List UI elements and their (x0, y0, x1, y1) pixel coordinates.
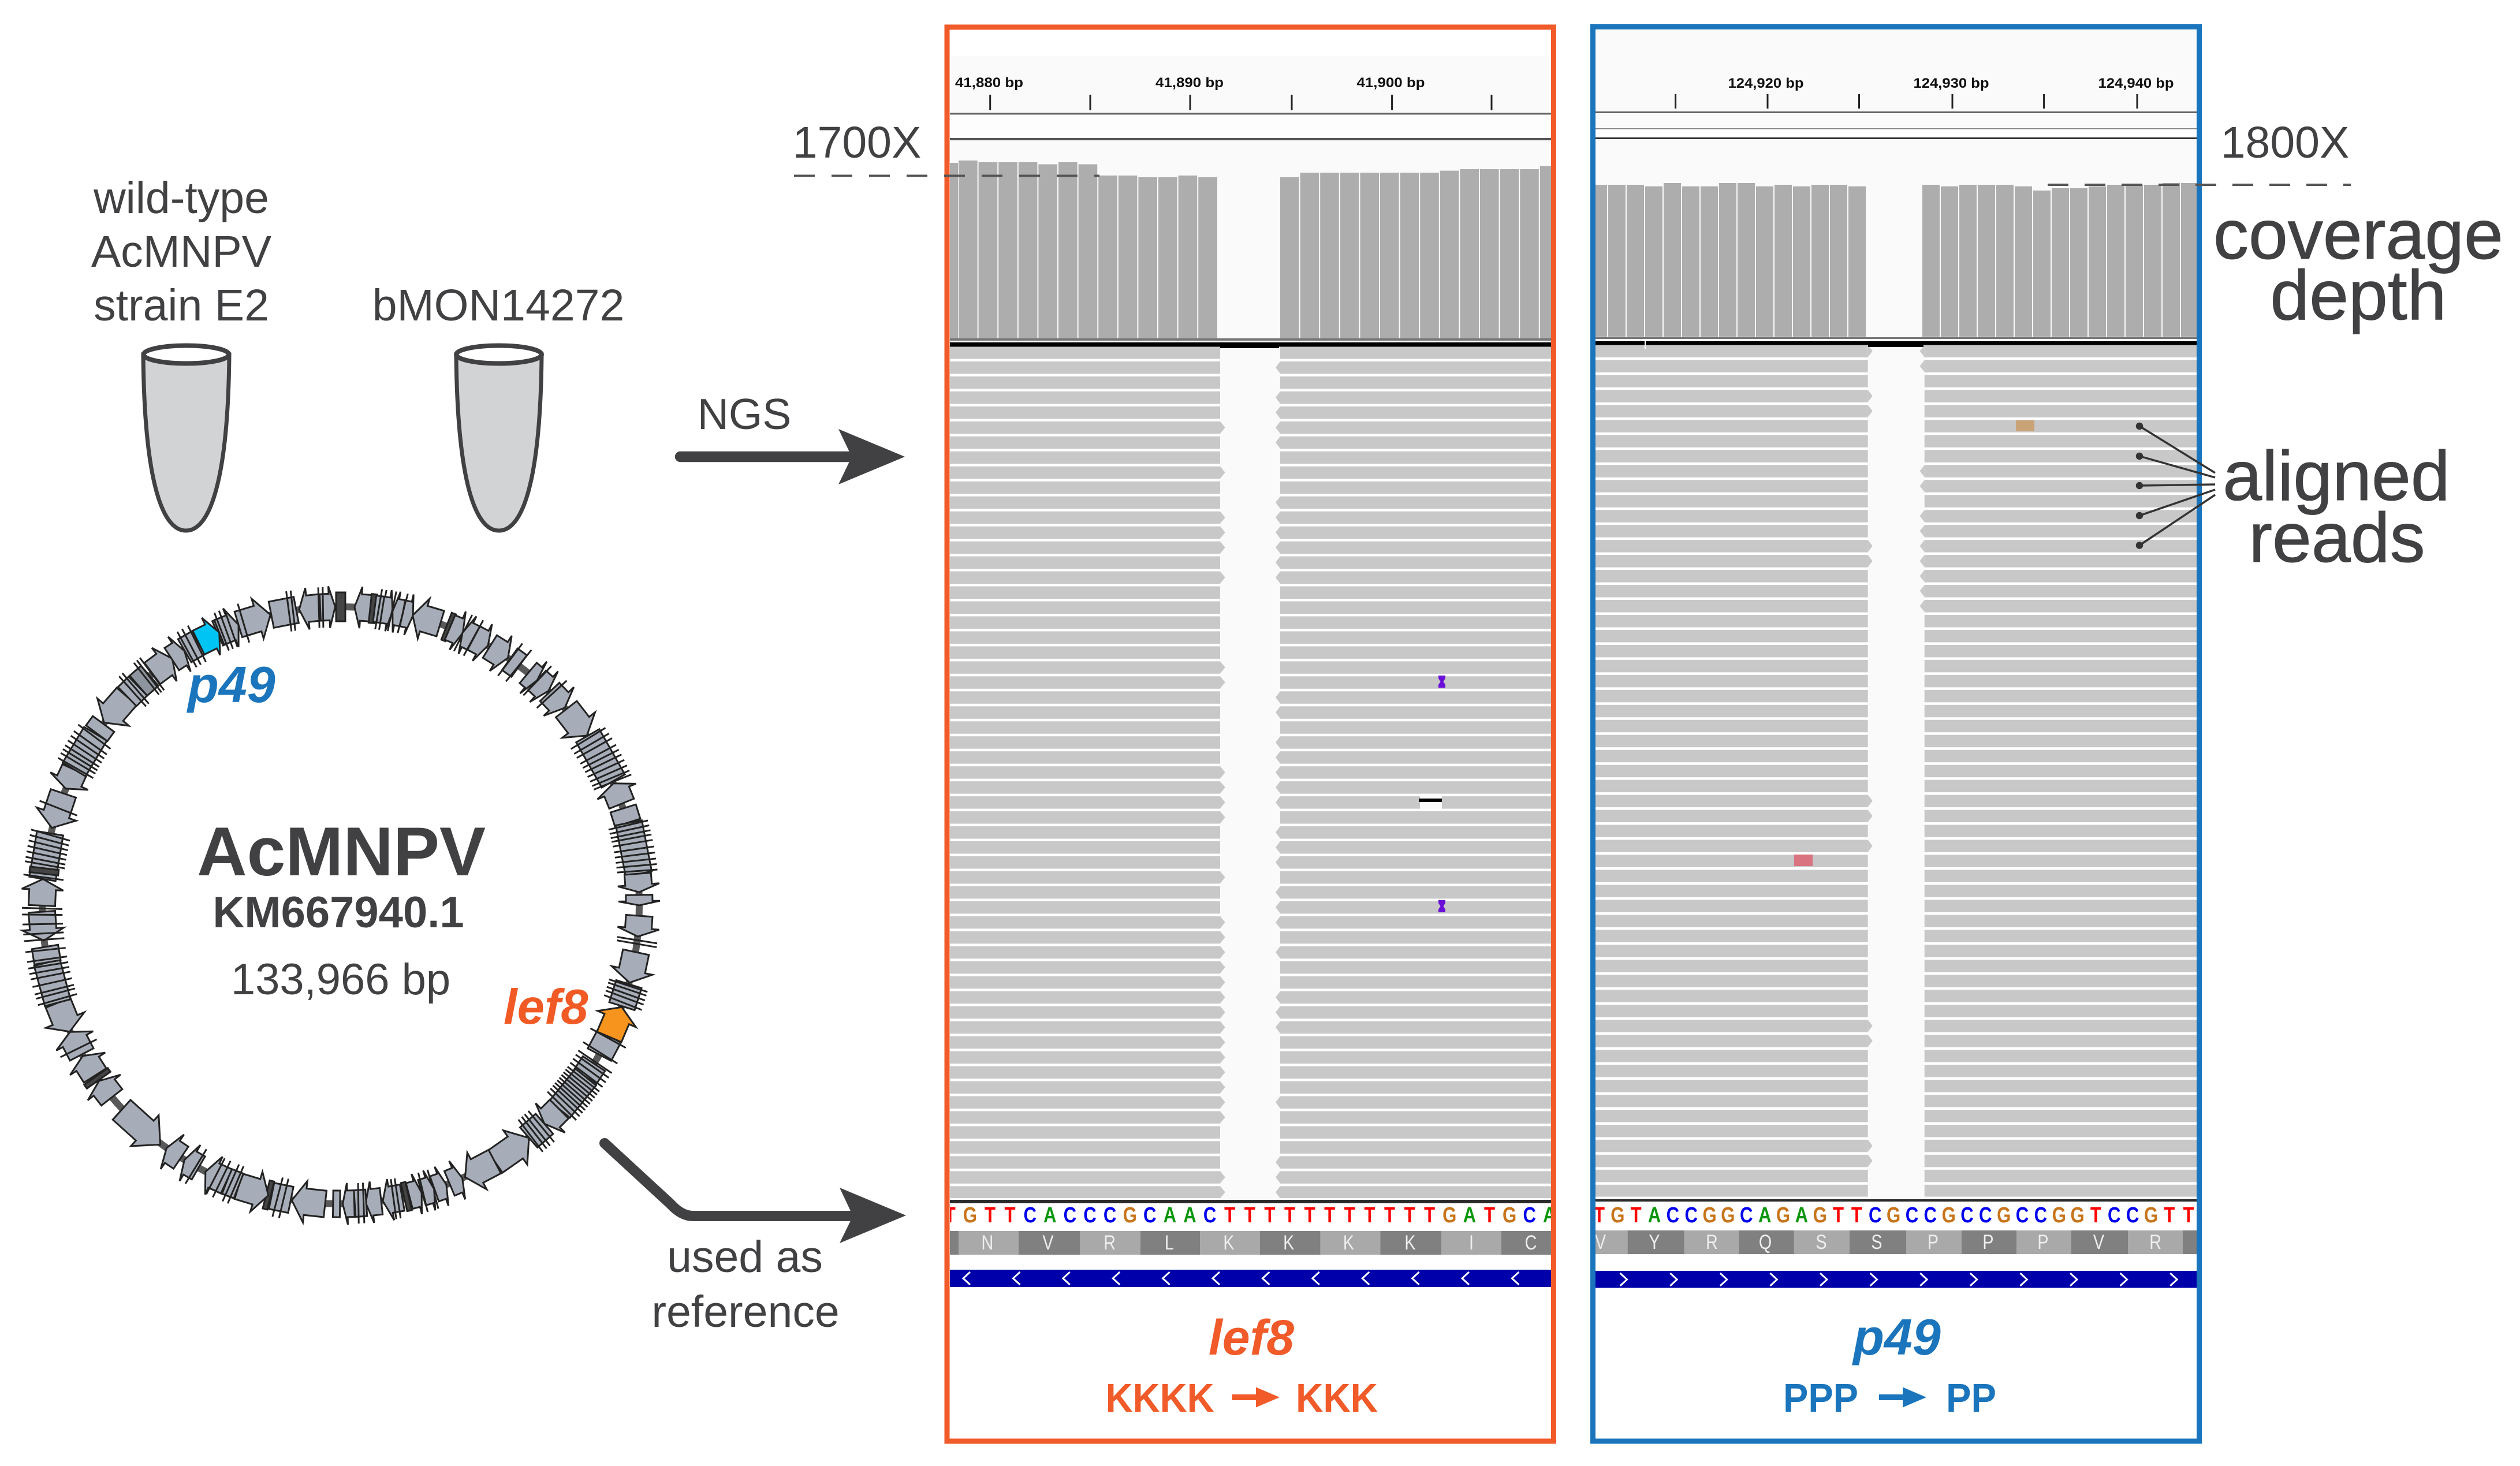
sequence: p49 amino acids: P (2037, 1230, 2049, 1254)
sequence: p49 nucleotides: A (1758, 1203, 1771, 1228)
sequence: lef8 amino acids: K (1343, 1231, 1354, 1254)
marker: mismatch brown (2016, 420, 2034, 431)
dashed line: 1700X level (794, 174, 1099, 177)
label: NGS: NGS (698, 390, 791, 438)
sequence: lef8 nucleotides: T (1484, 1203, 1495, 1228)
sequence: lef8 nucleotides: T (1324, 1203, 1335, 1228)
ruler: p49 position labels: 124,930 bp (1914, 76, 1989, 91)
ruler: p49 position labels (1728, 76, 2174, 91)
genome size: 133,966 bp (231, 955, 450, 1004)
sequence: lef8 nucleotides: T (1404, 1203, 1415, 1228)
panel: lef8 genome browser (945, 27, 1556, 1441)
sequence: p49 amino acids: S (1816, 1230, 1826, 1254)
circular genome map (21, 586, 660, 1225)
sequence: p49 amino acids: V (1595, 1230, 1606, 1254)
sequence: lef8 nucleotides: G (1503, 1203, 1516, 1228)
sequence: p49 nucleotides: G (2070, 1203, 2085, 1228)
label: wild-type AcMNPV strain E2: AcMNPV (91, 227, 272, 277)
icon: lef8 gene (590, 999, 641, 1045)
sequence: p49 amino acids (1595, 1230, 2197, 1254)
sequence: lef8 nucleotides: T (1384, 1203, 1395, 1228)
label: used as reference: reference (651, 1287, 840, 1337)
sequence: lef8 amino acids: L (1165, 1231, 1174, 1254)
panel frame: lef8 (947, 27, 1553, 1441)
sequence: lef8 nucleotides: C (1023, 1203, 1037, 1228)
label: used as reference (651, 1232, 840, 1337)
sequence: lef8 nucleotides (950, 1207, 1551, 1223)
sequence: p49 nucleotides: T (1631, 1203, 1642, 1228)
label: coverage depth: depth (2270, 256, 2447, 334)
ruler: lef8 position labels: 41,880 bp (955, 75, 1023, 91)
sequence: p49 nucleotides: G (2144, 1203, 2158, 1228)
sequence: p49 amino acids: R (2149, 1230, 2161, 1254)
sequence: lef8 amino acids: N (981, 1231, 993, 1254)
label: p49 on genome: p49 (187, 656, 275, 713)
sequence: p49 nucleotides: T (2090, 1203, 2101, 1228)
sequence: lef8 nucleotides: A (1183, 1203, 1196, 1228)
sequence: p49 nucleotides (1595, 1207, 2194, 1223)
sequence: p49 nucleotides: G (1611, 1203, 1625, 1228)
marker: insertion 1 (1438, 676, 1445, 688)
label: p49: p49 (1852, 1308, 1941, 1366)
chart: p49 aligned reads (1595, 345, 2197, 1196)
ruler: lef8 position labels: 41,890 bp (1155, 75, 1224, 91)
label: 1800X: 1800X (2221, 118, 2349, 167)
genome title: AcMNPV (197, 813, 486, 890)
sequence: lef8 nucleotides: C (1083, 1203, 1097, 1228)
sequence: lef8 amino acids: V (1042, 1231, 1054, 1254)
chart: lef8 coverage bars (950, 161, 1551, 338)
arrow: used as reference (605, 1143, 906, 1243)
label: aligned reads: reads (2249, 498, 2425, 577)
sequence: p49 nucleotides: G (1997, 1203, 2011, 1228)
label: bMON14272: bMON14272 (372, 281, 624, 330)
sequence: p49 nucleotides: C (2034, 1203, 2047, 1228)
marker: mismatch red (1794, 855, 1813, 866)
sequence: p49 nucleotides: C (1740, 1203, 1753, 1228)
sequence: lef8 nucleotides: T (1244, 1203, 1255, 1228)
sequence: p49 amino acids: P (1928, 1230, 1939, 1254)
sequence: lef8 amino acids: K (1223, 1231, 1235, 1254)
sequence: p49 nucleotides: A (1795, 1203, 1808, 1228)
sequence: p49 nucleotides: A (1648, 1203, 1661, 1228)
chart: p49 coverage bars (1595, 183, 2197, 337)
sequence: lef8 nucleotides: T (1304, 1203, 1315, 1228)
label: coverage depth: coverage (2213, 195, 2503, 274)
sequence: p49 nucleotides: T (1851, 1203, 1862, 1228)
sequence: p49 nucleotides: C (1979, 1203, 1992, 1228)
panel frame: p49 (1593, 27, 2199, 1441)
sequence: lef8 nucleotides: T (1264, 1203, 1275, 1228)
sequence: p49 nucleotides: C (2108, 1203, 2121, 1228)
ruler: p49 position labels: 124,940 bp (2098, 76, 2174, 91)
gene track: lef8 direction (950, 1270, 1551, 1287)
sequence: lef8 nucleotides: C (1203, 1203, 1216, 1228)
label: wild-type AcMNPV strain E2: strain E2 (94, 281, 269, 330)
label: aligned reads: aligned (2223, 437, 2450, 515)
sequence: p49 nucleotides: T (1594, 1203, 1605, 1228)
sequence: lef8 nucleotides: A (1043, 1203, 1057, 1228)
sequence: p49 nucleotides: G (1721, 1203, 1735, 1228)
sequence: p49 nucleotides: T (2183, 1203, 2194, 1228)
sequence: p49 nucleotides: G (1942, 1203, 1956, 1228)
sequence: p49 nucleotides: C (1869, 1203, 1881, 1228)
sequence: lef8 nucleotides: G (1123, 1203, 1137, 1228)
sequence: lef8 nucleotides: C (1064, 1203, 1076, 1228)
sequence: p49 nucleotides: C (2016, 1203, 2029, 1228)
chart: lef8 aligned reads (950, 346, 1551, 1198)
icon: sample tube 2 (456, 345, 542, 531)
icon: sample tube 1 (143, 345, 229, 531)
label: wild-type AcMNPV strain E2 (91, 173, 272, 330)
sequence: p49 nucleotides: G (1813, 1203, 1827, 1228)
label: coverage depth (2213, 195, 2503, 334)
sequence: p49 amino acids: P (1982, 1230, 1994, 1254)
sequence: lef8 nucleotides: T (1424, 1203, 1435, 1228)
label: wild-type AcMNPV strain E2: wild-type (93, 173, 269, 223)
accession number: KM667940.1 (213, 888, 464, 937)
sequence: p49 amino acids: S (1871, 1230, 1882, 1254)
marker: deletion (1419, 795, 1442, 809)
ruler: p49 position labels: 124,920 bp (1728, 76, 1804, 91)
sequence: lef8 amino acids: C (1525, 1231, 1537, 1254)
sequence: p49 nucleotides: T (2164, 1203, 2175, 1228)
sequence: lef8 nucleotides: T (1004, 1203, 1016, 1228)
sequence: p49 nucleotides: C (1924, 1203, 1937, 1228)
sequence: lef8 nucleotides: T (1344, 1203, 1355, 1228)
label: PPP to PP (1783, 1375, 1996, 1420)
sequence: lef8 amino acids: I (1469, 1231, 1474, 1254)
icon: p49 gene (189, 614, 229, 661)
sequence: lef8 amino acids (950, 1231, 1551, 1255)
ruler: lef8 position labels: 41,900 bp (1357, 75, 1425, 91)
leader lines: aligned reads (2137, 424, 2215, 548)
sequence: p49 nucleotides: G (1776, 1203, 1790, 1228)
label: PPP to PP: PPP (1783, 1375, 1858, 1420)
sequence: lef8 nucleotides: C (1104, 1203, 1116, 1228)
sequence: lef8 amino acids: K (1283, 1231, 1294, 1254)
ruler: lef8 position labels (955, 75, 1425, 91)
label: used as reference: used as (667, 1232, 823, 1282)
sequence: p49 nucleotides: G (2052, 1203, 2066, 1228)
sequence: lef8 nucleotides: C (1523, 1203, 1536, 1228)
sequence: lef8 nucleotides: A (1463, 1203, 1476, 1228)
sequence: p49 nucleotides: G (1702, 1203, 1717, 1228)
sequence: p49 nucleotides: C (1685, 1203, 1698, 1228)
sequence: lef8 amino acids: K (1404, 1231, 1416, 1254)
arrow: NGS (680, 429, 905, 484)
sequence: lef8 nucleotides: A (1543, 1203, 1556, 1228)
sequence: p49 nucleotides: C (1667, 1203, 1679, 1228)
sequence: p49 amino acids: Y (1649, 1230, 1660, 1254)
sequence: lef8 nucleotides: G (963, 1203, 977, 1228)
sequence: lef8 amino acids: R (1104, 1231, 1116, 1254)
sequence: p49 nucleotides: C (1960, 1203, 1974, 1228)
label: aligned reads (2223, 437, 2450, 577)
dashed line: 1800X level (2048, 184, 2351, 186)
sequence: lef8 nucleotides: T (1224, 1203, 1235, 1228)
label: KKKK to KKK: KKKK (1106, 1375, 1214, 1420)
label: KKKK to KKK: KKK (1296, 1375, 1378, 1420)
sequence: lef8 nucleotides: T (945, 1203, 956, 1228)
label: lef8 on genome: lef8 (504, 980, 588, 1035)
sequence: lef8 nucleotides: G (1442, 1203, 1456, 1228)
sequence: lef8 nucleotides: T (1364, 1203, 1375, 1228)
sequence: lef8 nucleotides: C (1143, 1203, 1157, 1228)
sequence: p49 nucleotides: C (1906, 1203, 1918, 1228)
gene track: p49 direction (1595, 1271, 2197, 1288)
label: KKKK to KKK (1106, 1375, 1378, 1420)
sequence: p49 amino acids: Q (1759, 1230, 1772, 1254)
sequence: p49 nucleotides: T (1833, 1203, 1844, 1228)
sequence: lef8 nucleotides: T (1284, 1203, 1295, 1228)
marker: insertion 2 (1438, 900, 1445, 912)
panel: p49 genome browser (1593, 27, 2199, 1441)
sequence: lef8 nucleotides: T (985, 1203, 996, 1228)
label: PPP to PP: PP (1946, 1375, 1996, 1420)
sequence: p49 amino acids: R (1706, 1230, 1718, 1254)
sequence: p49 amino acids: V (2093, 1230, 2105, 1254)
label: 1700X: 1700X (793, 118, 921, 167)
sequence: p49 nucleotides: C (2126, 1203, 2139, 1228)
sequence: lef8 nucleotides: A (1164, 1203, 1176, 1228)
sequence: p49 nucleotides: G (1887, 1203, 1900, 1228)
label: lef8: lef8 (1209, 1310, 1294, 1366)
